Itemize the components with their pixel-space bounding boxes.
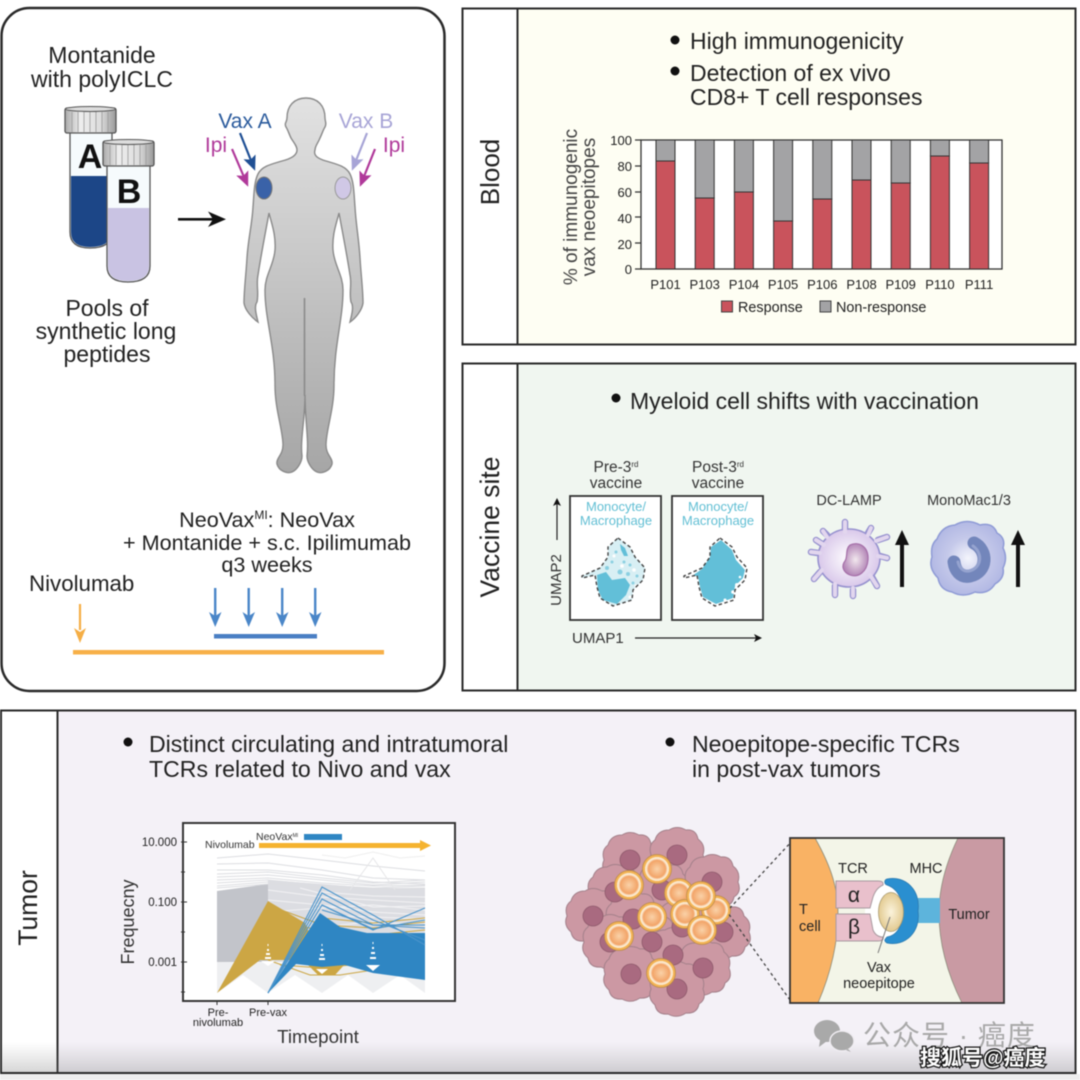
- axis title: Timepoint: Timepoint: [277, 1026, 360, 1047]
- greek labels: α: [848, 884, 860, 907]
- UMAP pre-3rd vaccine: Pre-3: [593, 459, 639, 476]
- UMAP pre-3rd vaccine: Monocyte/: [586, 499, 646, 514]
- y axis ticks: 20: [618, 237, 632, 252]
- icon: dendritic cell: [811, 522, 887, 596]
- x axis labels: P101: [650, 277, 681, 292]
- tick labels: Pre-: [208, 1007, 229, 1019]
- y axis title: % of immunogenic: [561, 129, 582, 285]
- zoom guide lines: [728, 840, 793, 1000]
- box labels: Tumor: [948, 907, 990, 923]
- y axis ticks: 60: [618, 185, 632, 200]
- tick labels: Pre-vax: [249, 1007, 287, 1019]
- arrow: nivolumab dose: [79, 604, 81, 630]
- TCR beta chain: [836, 914, 883, 941]
- peptide groove halo: [865, 882, 905, 942]
- y axis ticks: 0: [625, 262, 632, 277]
- icon: human body: [244, 98, 363, 473]
- label: Nivolumab: Nivolumab: [29, 571, 134, 596]
- y axis: 0.100: [148, 897, 177, 909]
- bottom fade: [2, 1042, 1075, 1072]
- bar chart: immunogenic neoepitopes: [561, 129, 1002, 316]
- icon: vial B: B: [117, 173, 141, 211]
- text: NeoVax MI regimen: NeoVax: [179, 507, 355, 532]
- label: Ipi right: Ipi: [383, 134, 405, 157]
- chart frame top: [183, 823, 455, 1001]
- axis title: Frequecny: Frequecny: [118, 879, 138, 965]
- text: NeoVax MI regimen: + Montanide + s.c. Ipilimumab: [123, 530, 411, 555]
- arrow: Vax B: [353, 133, 367, 168]
- schema: Nivolumab arrow: Nivolumab: [205, 839, 255, 851]
- y axis: [142, 837, 177, 969]
- x axis labels: P108: [846, 277, 877, 292]
- panel: Vaccine site: [462, 363, 1076, 691]
- heading: Montanide with polyICLC: Montanide: [48, 42, 156, 68]
- bullet: neoepitope TCRs: Neoepitope-specific TCRs: [692, 731, 960, 757]
- lower pale fan: [217, 962, 425, 993]
- stacked bars: [656, 140, 989, 269]
- text: NeoVax MI regimen: : NeoVax: [268, 507, 355, 532]
- bar: vaccine period: [214, 634, 317, 638]
- box labels: T: [799, 902, 808, 918]
- heading: Montanide with polyICLC: with polyICLC: [30, 66, 173, 92]
- legend: Response: [738, 300, 803, 316]
- bullet: neoepitope TCRs: in post-vax tumors: [692, 756, 881, 782]
- gold clonotypes: [217, 901, 322, 993]
- box labels: cell: [799, 919, 821, 935]
- bullet list: blood findings: High immunogenicity: [690, 28, 904, 54]
- bullet: myeloid shifts: Myeloid cell shifts with vaccination: [630, 388, 979, 414]
- arrow: Vax A: [240, 133, 254, 168]
- schema: NeoVax MI bar: MI: [293, 833, 298, 839]
- UMAP post-3rd vaccine: Post-3: [692, 459, 744, 476]
- bullet list: blood findings: CD8+ T cell responses: [690, 84, 922, 110]
- axis: UMAP2: [548, 500, 565, 606]
- box labels: MHC: [909, 861, 943, 877]
- panel: treatment schema: [2, 8, 444, 691]
- illustration: TCR-MHC detail box: [790, 838, 1004, 1003]
- arrow: DC-LAMP up: [895, 530, 909, 587]
- arrow: vials to patient: [178, 212, 226, 227]
- y axis ticks: 100: [610, 133, 632, 148]
- box labels: [799, 861, 990, 992]
- text: pools of synthetic long peptides: Pools of: [65, 295, 149, 321]
- T cell: [790, 838, 838, 1003]
- x axis labels: P110: [925, 277, 955, 292]
- arrow: Ipi right: [361, 149, 375, 184]
- label: Blood: Blood: [475, 139, 505, 205]
- x axis labels: P111: [965, 277, 993, 292]
- MHC groove: [885, 878, 918, 944]
- illustration: tumor cell cluster: [566, 828, 750, 1016]
- x axis labels: P106: [807, 277, 837, 292]
- UMAP pre-3rd vaccine: [570, 459, 661, 620]
- y axis: 10.000: [142, 837, 177, 849]
- x axis labels: P105: [768, 277, 798, 292]
- axis: UMAP2: UMAP2: [548, 554, 565, 606]
- watermark: Sohu account: 搜狐号@癌度: [920, 1046, 1045, 1070]
- TCR alpha chain: [836, 881, 883, 908]
- leader line: [878, 917, 890, 953]
- y axis title: vax neoepitopes: [579, 138, 600, 276]
- y axis ticks: 80: [618, 159, 632, 174]
- UMAP pre-3rd vaccine: vaccine: [590, 475, 642, 492]
- icon: vial A: A: [78, 138, 102, 176]
- arrows: vaccine doses: [209, 588, 322, 627]
- UMAP pre-3rd vaccine: Macrophage: [580, 513, 652, 528]
- line chart: TCR frequency: [118, 823, 455, 1047]
- watermark: WeChat account: 公众号 · 癌度: [863, 1020, 1036, 1051]
- bullet: distinct TCRs: Distinct circulating and intratumoral: [149, 731, 508, 757]
- arrowhead: nivolumab: [74, 628, 86, 643]
- bullet: distinct TCRs: TCRs related to Nivo and vax: [149, 756, 451, 782]
- tumor cell: [939, 838, 1004, 1003]
- box labels: Vax: [867, 960, 892, 976]
- bullet: neoepitope TCRs: [666, 731, 960, 782]
- icon: vial A: [65, 106, 116, 248]
- page bottom strip: [0, 1074, 1080, 1080]
- UMAP pre-3rd vaccine: rd: [631, 460, 639, 469]
- label: Vaccine site: Vaccine site: [475, 457, 505, 597]
- UMAP post-3rd vaccine: rd: [737, 460, 744, 469]
- y axis ticks: [610, 133, 632, 277]
- box labels: TCR: [838, 861, 868, 877]
- y axis: 0.001: [148, 957, 177, 969]
- UMAP post-3rd vaccine: Monocyte/: [688, 499, 748, 514]
- tick labels: [193, 1007, 287, 1029]
- tick labels: nivolumab: [193, 1017, 243, 1029]
- white notches: [261, 942, 380, 974]
- label: Vax B: Vax B: [339, 110, 393, 133]
- bar: nivolumab period: [73, 650, 384, 654]
- icon: vial B: [103, 140, 154, 282]
- schema: NeoVax MI bar: NeoVax: [256, 831, 293, 843]
- label: Ipi left: Ipi: [205, 134, 227, 157]
- UMAP post-3rd vaccine: Macrophage: [682, 513, 754, 528]
- x axis labels: P103: [690, 277, 720, 292]
- panel: Tumor: [1, 710, 1076, 1073]
- greek labels: [848, 884, 860, 939]
- bullet: distinct TCRs: [124, 731, 508, 782]
- text: pools of synthetic long peptides: peptides: [64, 341, 150, 367]
- blue clonotypes: [268, 913, 425, 993]
- label: Vax A: Vax A: [218, 110, 272, 133]
- arrow: MonoMac up: [1011, 530, 1025, 587]
- bullet list: blood findings: Detection of ex vivo: [690, 60, 891, 86]
- text: NeoVax MI regimen: q3 weeks: [221, 552, 313, 577]
- bullet list: blood findings: [670, 28, 922, 110]
- greek labels: β: [848, 916, 860, 939]
- icon: injection site B: [335, 177, 351, 199]
- legend: [722, 300, 926, 316]
- box labels: neoepitope: [843, 976, 915, 992]
- UMAP post-3rd vaccine: vaccine: [692, 475, 744, 492]
- vax neoepitope: [878, 892, 904, 932]
- legend: Non-response: [836, 300, 926, 316]
- UMAP post-3rd vaccine: [672, 459, 763, 620]
- x axis labels: [650, 277, 993, 292]
- icon: monocyte cell: [931, 522, 1006, 595]
- label: MonoMac1/3: MonoMac1/3: [927, 493, 1011, 509]
- text: NeoVax MI regimen: MI: [254, 508, 268, 522]
- y axis ticks: 40: [618, 211, 632, 226]
- x axis labels: P109: [886, 277, 916, 292]
- arrow: Ipi left: [232, 149, 247, 184]
- panel: Blood: [462, 8, 1076, 345]
- watermark: WeChat icon: [814, 1020, 854, 1052]
- MHC stem: [915, 898, 940, 923]
- icon: injection site A: [256, 177, 272, 199]
- text: pools of synthetic long peptides: synthetic long: [36, 318, 176, 344]
- grey clonotype band: [268, 880, 425, 962]
- axis: UMAP1: UMAP1: [572, 630, 624, 647]
- x axis labels: P104: [729, 277, 759, 292]
- schema: NeoVax MI bar: [256, 831, 342, 843]
- label: DC-LAMP: DC-LAMP: [816, 493, 882, 509]
- label: Tumor: Tumor: [13, 870, 43, 946]
- schema: Nivolumab arrow: [205, 839, 431, 851]
